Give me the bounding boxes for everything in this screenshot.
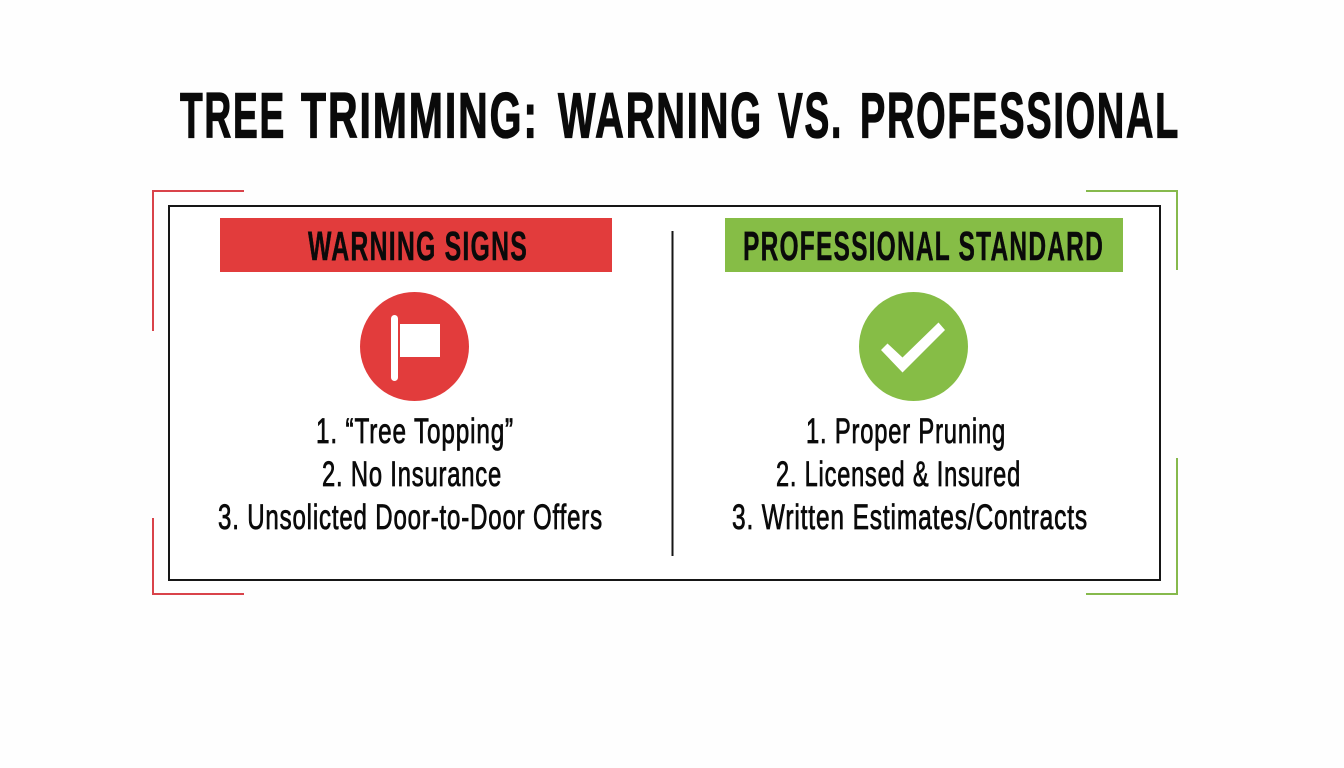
red corner bracket: bottom left — [153, 518, 244, 594]
center divider — [672, 231, 674, 556]
title: WARNING — [558, 80, 763, 152]
comparison frame — [169, 206, 1160, 580]
green corner bracket: bottom right — [1086, 458, 1177, 594]
green corner bracket: top right — [1086, 191, 1177, 270]
warning signs list: 1. “Tree Topping” — [316, 412, 514, 451]
icon: red flag — [360, 292, 469, 401]
title: VS. — [778, 80, 843, 152]
warning signs list: 2. No Insurance — [322, 455, 502, 494]
panel: warning signs — [218, 218, 612, 537]
professional standard list — [732, 412, 1088, 537]
icon: green check mark — [859, 292, 968, 401]
professional standard list: 2. Licensed & Insured — [776, 455, 1021, 494]
red corner bracket: top left — [153, 191, 244, 331]
professional standard list: 1. Proper Pruning — [806, 412, 1006, 451]
warning signs list: 3. Unsolicted Door-to-Door Offers — [218, 498, 603, 537]
panel: professional standard — [725, 218, 1123, 537]
title: TRIMMING: — [301, 80, 539, 152]
title — [180, 80, 1180, 152]
professional standard list: 3. Written Estimates/Contracts — [732, 498, 1088, 537]
warning heading banner — [220, 218, 612, 272]
warning signs list — [218, 412, 603, 537]
professional heading banner — [725, 218, 1123, 272]
professional heading banner: PROFESSIONAL STANDARD — [743, 223, 1104, 269]
warning heading banner: WARNING SIGNS — [308, 223, 528, 269]
title: TREE — [180, 80, 286, 152]
